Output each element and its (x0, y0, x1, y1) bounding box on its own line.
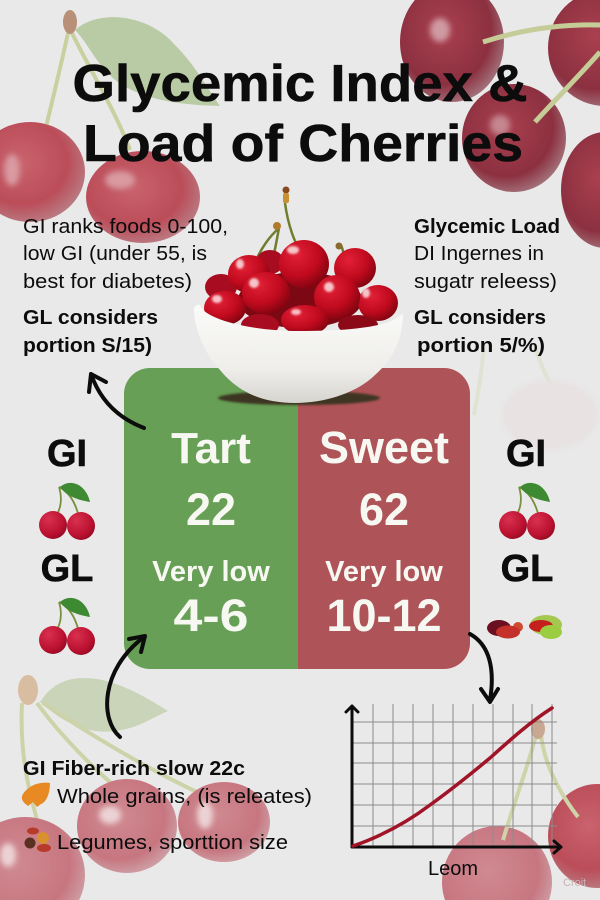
panel: sweet: 62 (359, 484, 409, 535)
text block: fiber tips: Whole grains, (is releates) (57, 786, 312, 808)
title: Load of Cherries (83, 115, 523, 173)
panel: sweet (298, 368, 470, 669)
panel: sweet: Very low (325, 556, 443, 588)
arrow: bottom left to panel (107, 636, 145, 737)
text block: GI and GL explainer left: best for diabetes) (23, 271, 192, 293)
text block: GI and GL explainer left (23, 216, 228, 357)
icon: cherries (39, 483, 95, 540)
text block: GI and GL explainer left: portion S/15) (23, 335, 152, 357)
right labels: GI (506, 433, 546, 475)
left labels: GL (41, 548, 93, 590)
text block: glycemic load explainer right: sugatr releess) (414, 271, 557, 293)
arrow: panel to chart (470, 634, 498, 702)
icon: bowl of cherries (194, 186, 403, 405)
background cherries: middle right (474, 345, 598, 450)
right labels: GL (501, 548, 553, 590)
panel: tart: 4-6 (174, 590, 248, 641)
icon: cherries (499, 483, 555, 540)
text block: glycemic load explainer right (414, 216, 560, 357)
text block: GI and GL explainer left: low GI (under 55, is (23, 243, 207, 265)
text block: fiber tips: Legumes, sporttion size (57, 832, 288, 854)
panel: tart: Very low (152, 556, 270, 588)
comparison panel (124, 368, 470, 669)
text block: fiber tips: GI Fiber-rich slow 22c (23, 758, 245, 780)
text block: GI and GL explainer left: GI ranks foods 0-100, (23, 216, 228, 238)
line chart: Leom (428, 858, 478, 880)
text block: GI and GL explainer left: GL considers (23, 307, 158, 329)
text block: glycemic load explainer right: DI Ingernes in (414, 243, 544, 265)
watermark: Croit (563, 877, 586, 889)
text block: glycemic load explainer right: Glycemic Load (414, 216, 560, 238)
background cherries: bottom right (442, 719, 600, 900)
text block: fiber tips (22, 758, 312, 854)
icon: cherries (39, 598, 95, 655)
right labels (487, 433, 562, 639)
icon: dried fruit and seeds (487, 615, 562, 639)
background cherries: top right (400, 0, 600, 248)
panel: tart: Tart (171, 424, 251, 473)
title: Glycemic Index & (72, 55, 528, 113)
text block: glycemic load explainer right: GL considers (414, 307, 546, 329)
left labels: GI (47, 433, 87, 475)
left labels (39, 433, 95, 655)
panel: tart (124, 368, 298, 669)
background cherries: top left (0, 10, 220, 243)
icon: whole grains (22, 783, 50, 807)
icon: legumes (24, 828, 51, 852)
panel: tart: 22 (186, 484, 236, 535)
background cherries: bottom left (0, 675, 270, 900)
text block: glycemic load explainer right: portion 5/%) (417, 335, 545, 357)
panel: sweet: Sweet (319, 422, 449, 473)
title (72, 55, 528, 173)
arrow: panel to left text (89, 374, 144, 428)
panel: sweet: 10-12 (326, 590, 442, 641)
line chart (346, 704, 561, 880)
